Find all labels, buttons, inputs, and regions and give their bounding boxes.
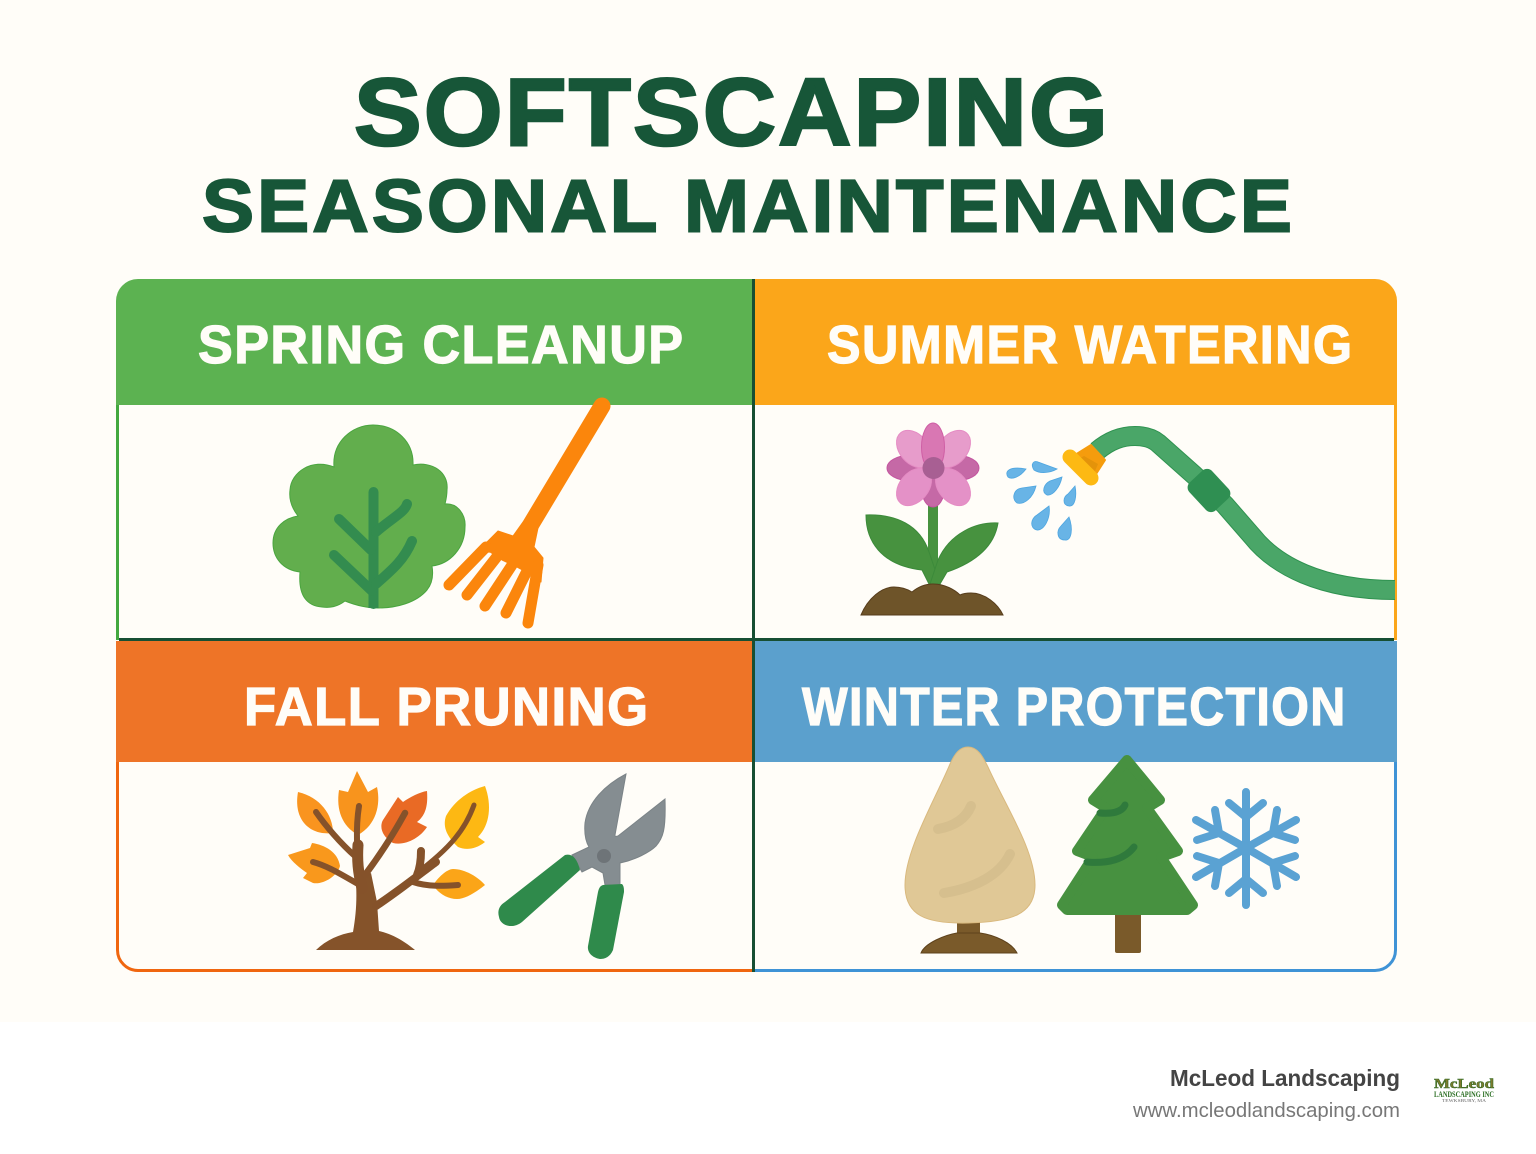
icon: rake	[449, 406, 602, 623]
title	[202, 59, 1295, 248]
icon: leafy shrub	[273, 425, 465, 608]
icon: garden hose	[1070, 436, 1395, 590]
logo: McLeod Landscaping	[1434, 1077, 1494, 1104]
footer: company name and website: www.mcleodlandscaping.com	[1132, 1100, 1400, 1122]
panel: summer watering	[753, 279, 1397, 640]
title: SEASONAL MAINTENANCE	[202, 164, 1295, 248]
heading: summer watering: SUMMER WATERING	[827, 315, 1354, 375]
footer: company name and website	[1132, 1065, 1400, 1122]
title: SOFTSCAPING	[354, 59, 1110, 166]
grid dividers	[119, 279, 1394, 972]
icon: pine tree	[1062, 760, 1193, 953]
heading: fall pruning: FALL PRUNING	[244, 677, 650, 737]
heading: spring cleanup: SPRING CLEANUP	[198, 315, 684, 375]
icon: autumn tree	[288, 771, 489, 950]
icon: flower in soil	[861, 423, 1003, 615]
icon: pruning shears	[498, 774, 665, 959]
icon: snowflake	[1196, 792, 1296, 905]
logo: McLeod Landscaping: LANDSCAPING INC	[1434, 1090, 1494, 1099]
panel: spring cleanup	[116, 279, 753, 640]
icon: water drops	[1007, 461, 1076, 540]
logo: McLeod Landscaping: TEWKSBURY, MA	[1442, 1098, 1487, 1104]
icon: burlap wrapped shrub	[905, 747, 1035, 953]
panel: winter protection	[753, 641, 1397, 970]
logo: McLeod Landscaping: McLeod	[1434, 1077, 1494, 1092]
heading: winter protection: WINTER PROTECTION	[802, 677, 1346, 737]
footer: company name and website: McLeod Landscaping	[1170, 1065, 1400, 1091]
panel: fall pruning	[116, 641, 753, 970]
